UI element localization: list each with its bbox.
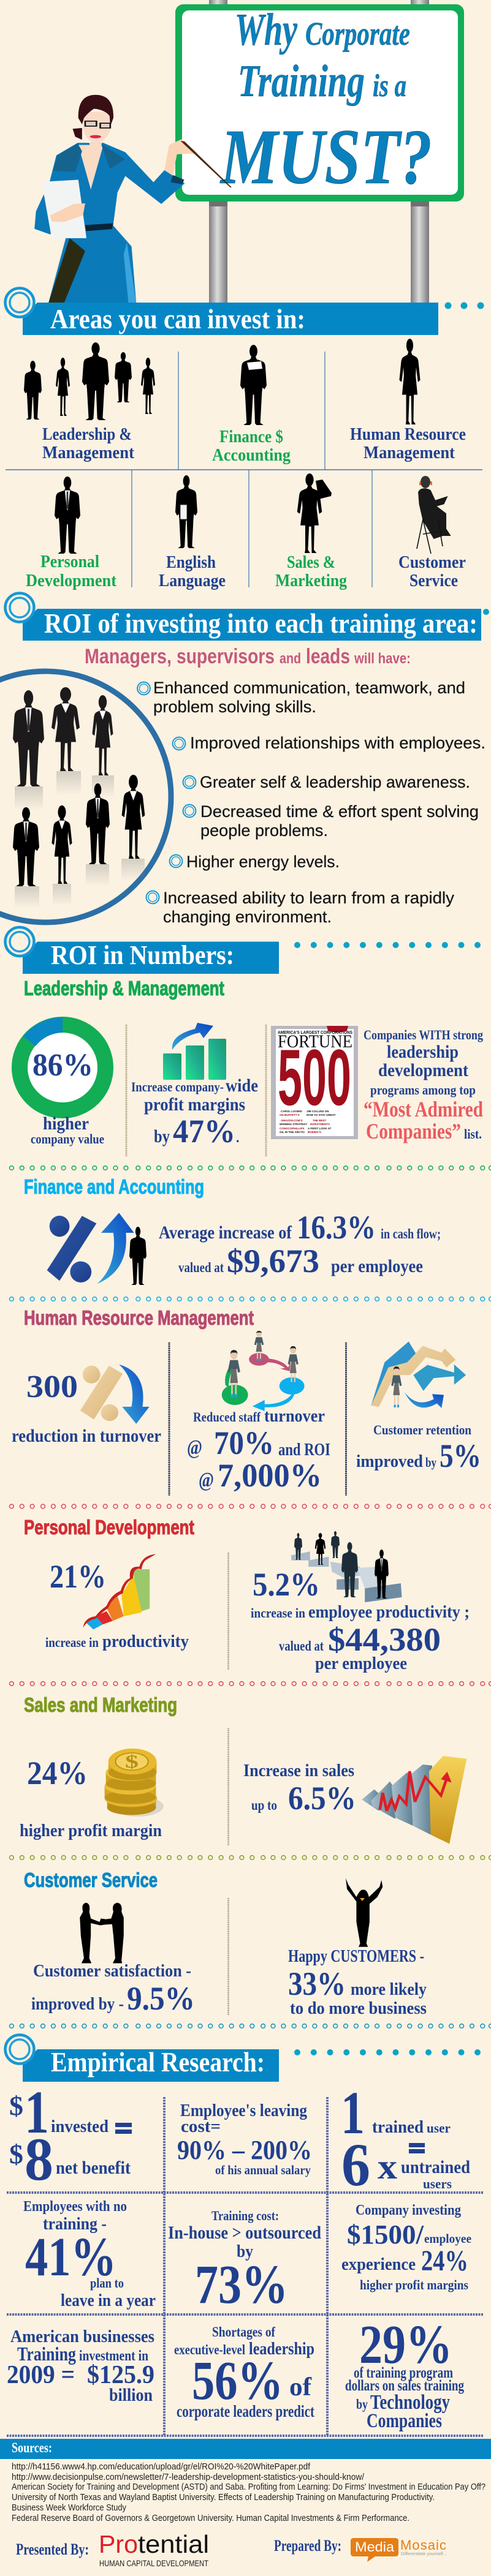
magazine cover: Fortune 500 bbox=[271, 1026, 358, 1139]
stat: company-wide profit margins: by bbox=[154, 1126, 170, 1147]
stat: 24 percent with coin stack bbox=[20, 1749, 164, 1840]
training area: human resource management: Human Resource bbox=[350, 425, 466, 444]
prepared by: Media Mosaic logo: Differentiate yourself... bbox=[401, 2552, 447, 2556]
stat: company-wide profit margins: Increase company- bbox=[131, 1079, 224, 1094]
research stat: 29 percent by technology companies: 29% bbox=[359, 2314, 452, 2375]
training area: sales and marketing: Marketing bbox=[275, 571, 347, 590]
magazine cover: Fortune 500: THE BEST bbox=[313, 1119, 327, 1122]
research stat: leaving cost: 90% – 200% bbox=[177, 2135, 312, 2165]
presented by: Protential logo: HUMAN CAPITAL DEVELOPMENT bbox=[99, 2558, 208, 2568]
research stat: American businesses training investment: Training bbox=[17, 2343, 76, 2365]
research stat: leadership shortages 56 percent: executive-level bbox=[174, 2342, 245, 2357]
stat: customer retention bbox=[356, 1422, 481, 1474]
research stat: American businesses training investment: billion bbox=[109, 2385, 153, 2405]
presented by: Protential logo bbox=[16, 2530, 209, 2568]
title: Why bbox=[235, 5, 298, 55]
heading: human resource management: Human Resource Management bbox=[24, 1306, 254, 1329]
icon: customer retention arrows bbox=[371, 1341, 466, 1408]
sources list: Business Week Workforce Study bbox=[12, 2503, 126, 2513]
training area: english language: Language bbox=[159, 571, 226, 590]
magazine cover: Fortune 500: OIL IN THE ARCTIC bbox=[280, 1131, 305, 1134]
research stat: leadership shortages 56 percent: corporate leaders predict bbox=[177, 2402, 314, 2420]
research stat: 41 percent plan to leave: training - bbox=[43, 2214, 107, 2234]
research stat: training cost 73 percent bbox=[168, 2208, 321, 2315]
stat: reduced staff turnover and ROI: Reduced staff bbox=[193, 1409, 261, 1425]
divider: olive dots bbox=[10, 1856, 491, 1859]
magazine cover: Fortune 500: AMERICA'S LARGEST CORPORATIONS bbox=[278, 1030, 352, 1035]
banner: ROI in numbers: ROI in Numbers: bbox=[51, 940, 234, 970]
sources list: http://h41156.www4.hp.com/education/upload/gr/el/ROI%20-%20WhitePaper.pdf bbox=[12, 2461, 311, 2472]
divider: cyan dots bbox=[10, 1297, 491, 1301]
text: most admired companies: list. bbox=[464, 1126, 482, 1142]
presented by: Protential logo: Presented By: bbox=[16, 2540, 89, 2558]
research stat: American businesses training investment bbox=[7, 2327, 154, 2405]
subheading: managers supervisors and leads: supervisors bbox=[177, 645, 275, 668]
research stat: trained user: users bbox=[423, 2176, 452, 2191]
icon: businesspeople on puzzle pieces bbox=[291, 1531, 402, 1602]
stat: 5.2 percent employee productivity: per employee bbox=[315, 1654, 407, 1673]
research stat: leadership shortages 56 percent bbox=[174, 2324, 314, 2420]
research stat: leadership shortages 56 percent: Shortages of bbox=[212, 2324, 275, 2340]
icon: happy customer silhouette: to do more business bbox=[290, 1998, 427, 2018]
research stat: 29 percent by technology companies: by bbox=[356, 2397, 368, 2412]
heading: sales and marketing: Sales and Marketing bbox=[24, 1693, 177, 1716]
circle of managers silhouettes bbox=[0, 671, 171, 922]
research stat: dollar return: invested bbox=[51, 2117, 108, 2136]
subheading: managers supervisors and leads: leads bbox=[306, 645, 350, 668]
training area: personal development bbox=[26, 476, 117, 590]
heading: personal development: Personal Development bbox=[24, 1516, 194, 1538]
heading: customer service: Customer Service bbox=[24, 1869, 158, 1891]
research stat: leadership shortages 56 percent: leadership bbox=[249, 2339, 314, 2359]
stat: 24 percent with coin stack: 24% bbox=[27, 1755, 88, 1791]
research stat: company investing: higher profit margins bbox=[360, 2277, 468, 2292]
bullet list: manager benefits: Higher energy levels. bbox=[186, 853, 340, 871]
sources list: University of North Texas and Wayland Baptist University. Effects of Leadership Training on Manufacturing Productivity. bbox=[12, 2492, 435, 2503]
training area: finance and accounting: Accounting bbox=[212, 446, 291, 465]
training area: personal development: Development bbox=[26, 571, 117, 590]
subheading: managers supervisors and leads: will have: bbox=[354, 650, 411, 667]
bullet list: manager benefits: problem solving skills. bbox=[153, 698, 316, 716]
research stat: American businesses training investment: American businesses bbox=[10, 2327, 154, 2346]
title: Corporate bbox=[305, 15, 410, 52]
text: most admired companies: development bbox=[378, 1060, 468, 1080]
banner: ROI in numbers bbox=[5, 927, 481, 974]
magazine cover: Fortune 500: WINNING STRATEGY bbox=[280, 1123, 307, 1126]
bullet list: manager benefits: Decreased time & effort spent solving bbox=[200, 802, 479, 821]
title: Training bbox=[238, 56, 365, 107]
training area: english language bbox=[159, 475, 226, 590]
icon: green bar chart with arrow bbox=[163, 1023, 226, 1080]
research stat: 41 percent plan to leave: Employees with no bbox=[23, 2199, 127, 2215]
stat: 21 percent productivity: increase in bbox=[45, 1635, 99, 1650]
divider line bbox=[227, 1553, 229, 1670]
icon: handshake silhouettes: 9.5% bbox=[127, 1980, 195, 2017]
icon: happy customer silhouette: Happy CUSTOMERS - bbox=[288, 1946, 424, 1966]
stat: 16.3 percent cash flow: Average increase of bbox=[159, 1222, 292, 1243]
donut chart: 86 percent bbox=[20, 1017, 105, 1147]
magazine cover: Fortune 500: FORTUNE bbox=[278, 1031, 352, 1052]
sources bar bbox=[0, 2439, 491, 2459]
divider: green dots bbox=[10, 1166, 491, 1170]
donut chart: 86 percent: company value bbox=[31, 1131, 104, 1147]
icon: handshake silhouettes: Customer satisfaction - bbox=[33, 1961, 191, 1981]
stat: customer retention: 5% bbox=[440, 1437, 481, 1474]
sources bar: Sources: bbox=[12, 2440, 52, 2455]
research stat: 41 percent plan to leave: 41% bbox=[25, 2227, 116, 2288]
research stat: trained user: untrained bbox=[401, 2157, 470, 2177]
signpost bbox=[175, 0, 464, 304]
icon: percent, arrow and businessman bbox=[47, 1213, 147, 1285]
research stat: leaving cost: cost= bbox=[181, 2117, 221, 2136]
magazine cover: Fortune 500: BOEING'S bbox=[308, 1131, 321, 1134]
banner: empirical research: Empirical Research: bbox=[51, 2046, 265, 2077]
research stat: 29 percent by technology companies: Companies bbox=[367, 2410, 442, 2432]
prepared by: Media Mosaic logo bbox=[274, 2537, 447, 2562]
research stat: 29 percent by technology companies: Technology bbox=[370, 2391, 450, 2414]
bullet list: manager benefits: people problems. bbox=[200, 821, 328, 840]
icon: handshake silhouettes bbox=[31, 1903, 195, 2017]
training area: finance and accounting: Finance $ bbox=[219, 427, 283, 446]
training area: sales and marketing bbox=[275, 473, 347, 590]
research stat: training cost 73 percent: 73% bbox=[195, 2254, 288, 2315]
research stat: company investing: 24% bbox=[421, 2245, 468, 2277]
bullet list: manager benefits: Enhanced communication, teamwork, and bbox=[153, 679, 465, 697]
research stat: company investing: Company investing bbox=[356, 2202, 461, 2218]
title bbox=[219, 5, 432, 200]
research stat: American businesses training investment: 2009 = bbox=[7, 2361, 75, 2389]
magazine cover: Fortune 500: JIM COLLINS ON bbox=[306, 1110, 329, 1113]
icon: handshake silhouettes: improved by - bbox=[31, 1994, 124, 2014]
title: is a bbox=[373, 69, 406, 104]
stat: reduced staff turnover and ROI: and ROI bbox=[278, 1441, 330, 1459]
research grid lines bbox=[7, 2097, 484, 2436]
stat: increase in sales 6.5 percent bbox=[243, 1761, 356, 1817]
prepared by: Media Mosaic logo: Mosaic bbox=[400, 2537, 446, 2553]
bullet list: manager benefits: Increased ability to learn from a rapidly bbox=[163, 889, 454, 907]
training area: english language: English bbox=[166, 553, 216, 572]
training area: customer service bbox=[398, 476, 466, 590]
research stat: leaving cost: of his annual salary bbox=[215, 2163, 311, 2177]
training area: leadership and management: Management bbox=[42, 443, 135, 462]
stat: 5.2 percent employee productivity: increase in bbox=[251, 1605, 305, 1621]
research stat: 41 percent plan to leave: leave in a year bbox=[61, 2291, 156, 2310]
magazine cover: Fortune 500: ON BUFFETT'S bbox=[280, 1113, 300, 1117]
research stat: 29 percent by technology companies: of training program bbox=[354, 2365, 453, 2381]
stat: 21 percent productivity: productivity bbox=[102, 1632, 189, 1651]
icon: happy customer silhouette: 33% bbox=[288, 1965, 346, 2002]
stat: 300 percent reduction in turnover bbox=[12, 1365, 161, 1446]
stat: 5.2 percent employee productivity: employee productivity ; bbox=[308, 1602, 470, 1622]
presented by: Protential logo: Pro bbox=[99, 2530, 138, 2558]
research stat: leaving cost bbox=[177, 2101, 312, 2177]
banner: empirical research bbox=[5, 2035, 481, 2082]
stat: company-wide profit margins: profit margins bbox=[144, 1094, 245, 1115]
text: most admired companies: programs among top bbox=[370, 1082, 476, 1098]
divider line bbox=[227, 1728, 229, 1845]
research stat: trained user: trained bbox=[372, 2117, 424, 2137]
stat: customer retention: by bbox=[425, 1455, 436, 1470]
stat: 21 percent productivity: 21% bbox=[50, 1558, 106, 1595]
sources list bbox=[12, 2461, 485, 2523]
research stat: training cost 73 percent: Training cost: bbox=[211, 2208, 279, 2223]
stat: 5.2 percent employee productivity: valued at bbox=[279, 1638, 324, 1654]
stat: reduced staff turnover and ROI bbox=[187, 1406, 330, 1494]
training area: customer service: Customer bbox=[398, 553, 466, 572]
research stat: 41 percent plan to leave bbox=[23, 2199, 156, 2310]
stat: company-wide profit margins: wide bbox=[226, 1075, 258, 1096]
donut chart: 86 percent: higher bbox=[43, 1113, 89, 1134]
magazine cover: Fortune 500: CONOCOPHILLIPS bbox=[280, 1127, 305, 1130]
stat: 300 percent reduction in turnover: reduction in turnover bbox=[12, 1426, 161, 1446]
stat: 16.3 percent cash flow: 16.3% bbox=[297, 1209, 376, 1246]
text: most admired companies bbox=[363, 1027, 483, 1143]
prepared by: Media Mosaic logo: Prepared By: bbox=[274, 2537, 341, 2555]
magazine cover: Fortune 500: AMAZON.COM'S bbox=[281, 1119, 303, 1122]
icon: happy customer silhouette bbox=[288, 1878, 427, 2018]
divider line bbox=[227, 1898, 229, 2016]
research stat: American businesses training investment: investment in bbox=[79, 2348, 148, 2364]
magazine cover: Fortune 500: A FIRST LOOK AT bbox=[308, 1127, 332, 1130]
stat: reduced staff turnover and ROI: turnover bbox=[264, 1406, 325, 1426]
sources list: Federal Reserve Board of Governors & Georgetown University. Human Capital Investments & Firm Performance. bbox=[12, 2513, 409, 2523]
training area: human resource management bbox=[350, 339, 466, 462]
research stat: company investing: employee bbox=[424, 2231, 471, 2246]
stat: 16.3 percent cash flow: $9,673 bbox=[227, 1243, 319, 1279]
research stat: company investing bbox=[341, 2202, 471, 2292]
icon: happy customer silhouette: more likely bbox=[351, 1979, 427, 1999]
research stat: American businesses training investment: $125.9 bbox=[87, 2361, 154, 2389]
training area: sales and marketing: Sales & bbox=[287, 553, 335, 572]
stat: customer retention: improved bbox=[356, 1452, 423, 1471]
stat: increase in sales 6.5 percent: up to bbox=[251, 1798, 277, 1813]
training area: leadership and management: Leadership & bbox=[42, 425, 132, 444]
divider: red dots bbox=[10, 1682, 491, 1685]
stat: reduced staff turnover and ROI: @ bbox=[187, 1436, 202, 1459]
research stat: dollar return: $ bbox=[9, 2139, 23, 2169]
heading: finance and accounting: Finance and Accounting bbox=[24, 1175, 204, 1198]
research stat: trained user bbox=[341, 2079, 470, 2199]
heading: leadership and management: Leadership & Management bbox=[24, 977, 224, 1000]
training area: personal development: Personal bbox=[40, 552, 99, 571]
divider: blue dots bbox=[10, 2024, 491, 2028]
magazine cover: Fortune 500: CAROL LOOMIS bbox=[281, 1110, 302, 1113]
bullet list: manager benefits: Greater self & leadership awareness. bbox=[200, 773, 470, 791]
stat: reduced staff turnover and ROI: 70% bbox=[214, 1425, 274, 1461]
grid lines: training areas bbox=[6, 352, 482, 587]
stat: 300 percent reduction in turnover: 300 bbox=[26, 1369, 78, 1404]
research stat: dollar return: 1 bbox=[25, 2078, 49, 2146]
stat: 16.3 percent cash flow: per employee bbox=[331, 1256, 423, 1276]
stat: company-wide profit margins: . bbox=[236, 1130, 239, 1145]
icon: rising sales chart bbox=[362, 1756, 466, 1843]
research stat: 41 percent plan to leave: plan to bbox=[90, 2275, 124, 2291]
stat: increase in sales 6.5 percent: Increase in sales bbox=[243, 1761, 354, 1780]
stat: reduced staff turnover and ROI: 7,000% bbox=[218, 1457, 322, 1494]
research stat: training cost 73 percent: by bbox=[237, 2242, 253, 2261]
banner: areas you can invest in: Areas you can invest in: bbox=[50, 303, 305, 334]
illustration: presenter woman with pointer bbox=[34, 95, 232, 303]
research stat: trained user: user bbox=[427, 2120, 451, 2136]
magazine cover: Fortune 500: HOW TO STAY GREAT bbox=[306, 1113, 336, 1117]
training area: human resource management: Management bbox=[363, 443, 455, 462]
bullet list: manager benefits: Improved relationships with employees. bbox=[190, 734, 485, 752]
stat: customer retention: Customer retention bbox=[373, 1422, 471, 1437]
presented by: Protential logo: tential bbox=[138, 2530, 209, 2558]
sources list: http://www.decisionpulse.com/newsletter/7-leadership-development-statistics-you-should-know/ bbox=[12, 2472, 365, 2482]
training area: finance and accounting bbox=[212, 345, 291, 465]
stat: company-wide profit margins: 47% bbox=[173, 1113, 235, 1150]
research stat: leaving cost: Employee's leaving bbox=[180, 2101, 307, 2120]
stat: 21 percent productivity bbox=[45, 1554, 189, 1651]
divider: red dots bbox=[10, 1504, 491, 1508]
research stat: dollar return: $ bbox=[9, 2091, 23, 2121]
stat: 16.3 percent cash flow bbox=[159, 1209, 441, 1279]
bullet list: manager benefits bbox=[137, 679, 485, 926]
research stat: company investing: experience bbox=[341, 2254, 416, 2274]
research stat: training cost 73 percent: In-house > outsourced bbox=[168, 2223, 321, 2243]
stat: 5.2 percent employee productivity: 5.2% bbox=[253, 1566, 320, 1603]
research stat: dollar return: net benefit bbox=[56, 2158, 131, 2178]
research stat: company investing: $1500/ bbox=[347, 2220, 424, 2250]
research stat: dollar return bbox=[9, 2078, 132, 2193]
research stat: 29 percent by technology companies bbox=[345, 2314, 464, 2432]
research stat: leadership shortages 56 percent: 56% bbox=[192, 2351, 283, 2411]
donut chart: 86 percent: 86% bbox=[32, 1048, 93, 1083]
stat: company-wide profit margins bbox=[131, 1075, 258, 1150]
research stat: trained user: x bbox=[378, 2147, 397, 2186]
banner: ROI of investing bbox=[5, 593, 489, 641]
stat: reduced staff turnover and ROI: @ bbox=[199, 1469, 214, 1491]
stat: 5.2 percent employee productivity: $44,380 bbox=[328, 1621, 441, 1658]
stat: 24 percent with coin stack: higher profit margin bbox=[20, 1821, 162, 1840]
icon: staff turnover cycle bbox=[222, 1331, 305, 1411]
training area: customer service: Service bbox=[409, 571, 458, 590]
research stat: leadership shortages 56 percent: of bbox=[289, 2373, 312, 2401]
text: most admired companies: Companies” bbox=[366, 1119, 461, 1143]
title: MUST? bbox=[219, 113, 432, 200]
subheading: managers supervisors and leads bbox=[85, 645, 411, 668]
prepared by: Media Mosaic logo: Media bbox=[355, 2539, 395, 2555]
bullet list: manager benefits: changing environment. bbox=[163, 908, 332, 926]
subheading: managers supervisors and leads: and bbox=[280, 650, 301, 667]
stat: 5.2 percent employee productivity bbox=[251, 1566, 470, 1673]
magazine cover: Fortune 500: 500 bbox=[278, 1033, 351, 1122]
stat: 24 percent with coin stack: $ bbox=[125, 1752, 139, 1772]
stat: 16.3 percent cash flow: valued at bbox=[178, 1260, 224, 1275]
subheading: managers supervisors and leads: Managers, bbox=[85, 645, 172, 668]
magazine cover: Fortune 500: INVESTMENTS bbox=[310, 1123, 330, 1126]
research stat: trained user: 1 bbox=[341, 2079, 365, 2147]
banner: areas you can invest in bbox=[5, 288, 484, 335]
training area: leadership and management bbox=[24, 342, 155, 462]
stat: 16.3 percent cash flow: in cash flow; bbox=[381, 1226, 441, 1241]
text: most admired companies: leadership bbox=[387, 1042, 459, 1062]
research stat: trained user: 6 bbox=[341, 2131, 370, 2199]
divider lines bbox=[126, 1025, 266, 1156]
divider lines bbox=[169, 1343, 346, 1496]
research stat: dollar return: 8 bbox=[25, 2125, 53, 2193]
stat: increase in sales 6.5 percent: 6.5% bbox=[288, 1780, 356, 1817]
